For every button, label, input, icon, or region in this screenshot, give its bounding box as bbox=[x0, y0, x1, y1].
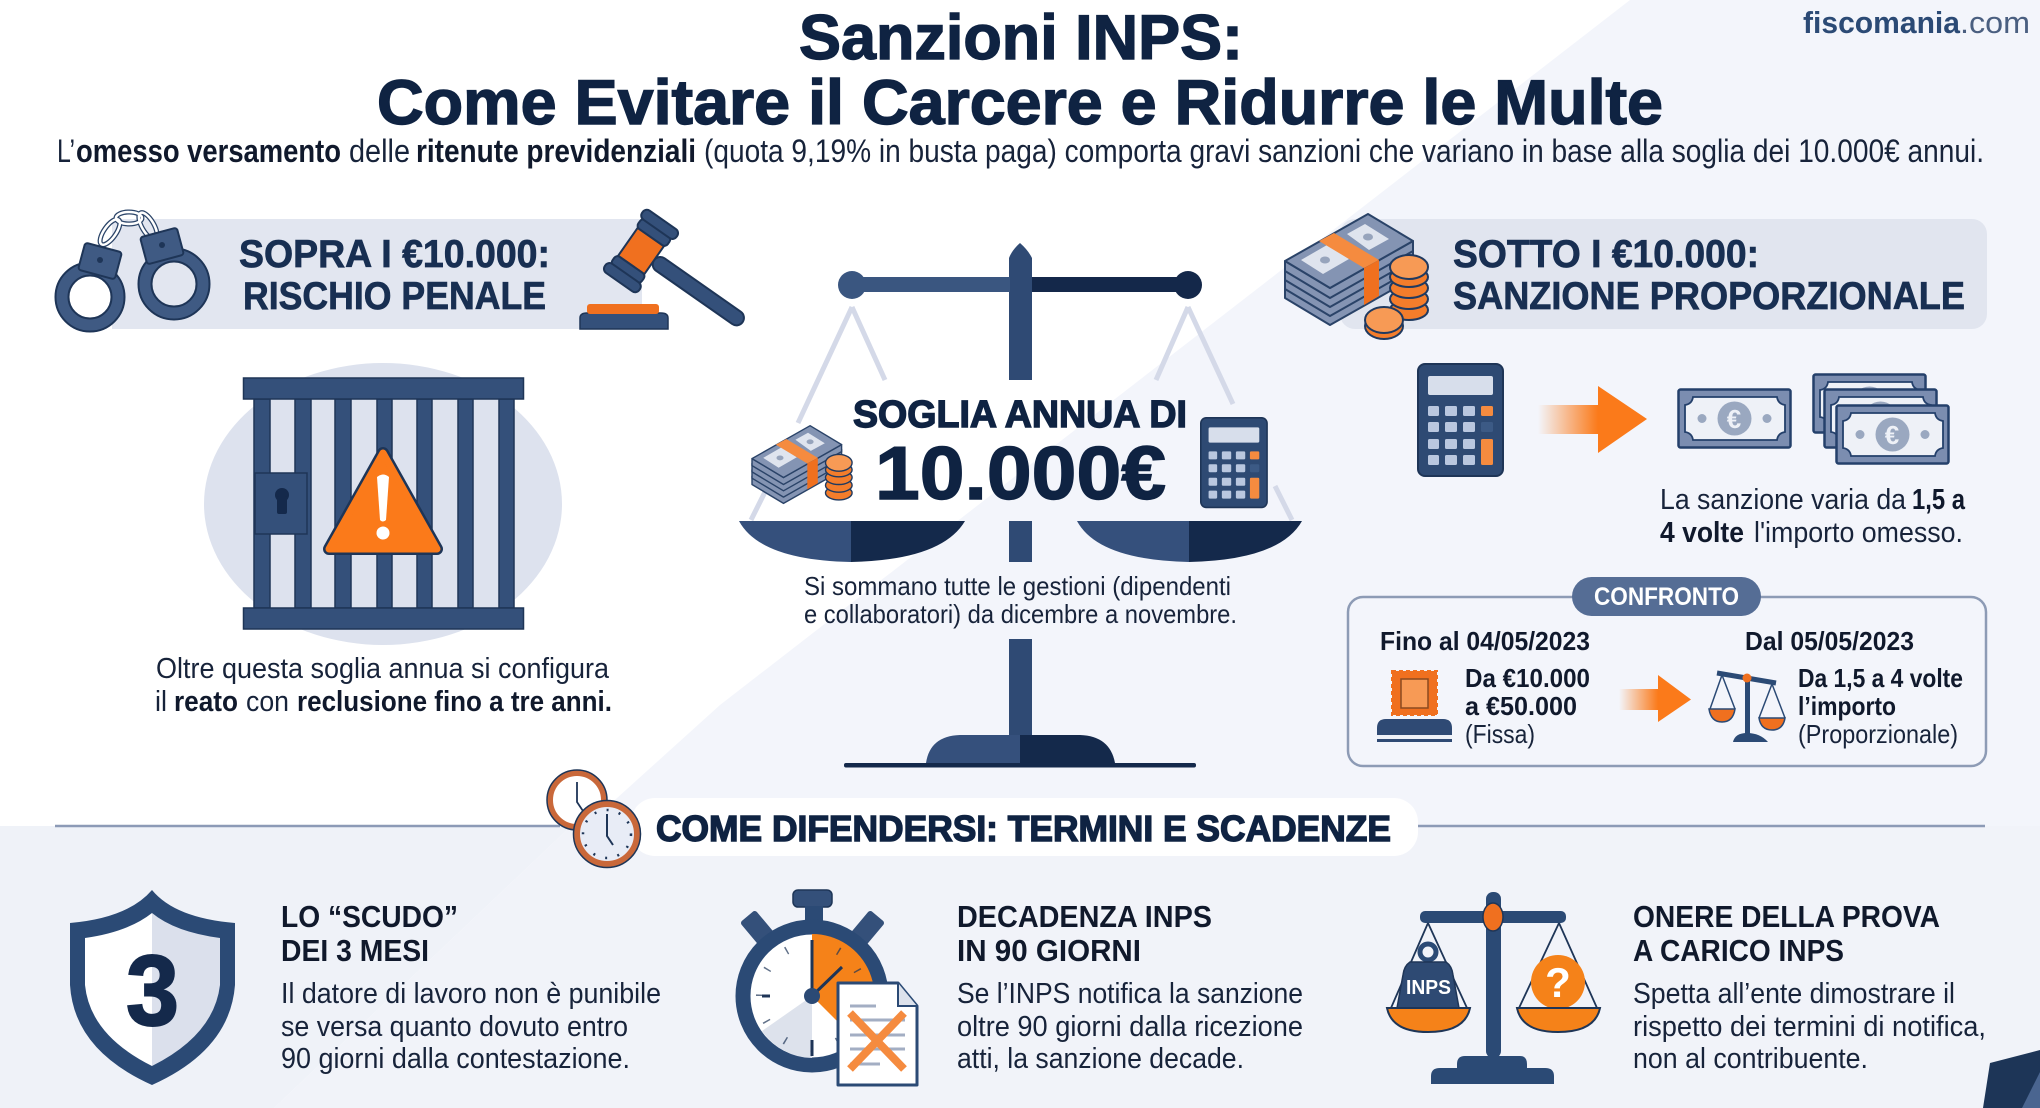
icon: calculator bbox=[1418, 364, 1503, 476]
item: scudo bbox=[70, 890, 661, 1085]
banner heading: SANZIONE PROPORZIONALE bbox=[1453, 275, 1965, 318]
column: dal 05/05/2023: (Proporzionale) bbox=[1798, 719, 1958, 749]
item: decadenza bbox=[740, 890, 1303, 1085]
icon: shield: 3 bbox=[126, 935, 179, 1047]
column: dal 05/05/2023: Dal 05/05/2023 bbox=[1745, 626, 1914, 656]
section: come difendersi bbox=[55, 770, 1986, 1085]
text: onere: Spetta all’ente dimostrare il bbox=[1633, 978, 1955, 1010]
text: decadenza bbox=[957, 899, 1303, 1075]
section heading pill bbox=[631, 798, 1418, 856]
text: sanzione varia bbox=[1660, 484, 1966, 549]
logo: fiscomania.com: fiscomania bbox=[1803, 5, 1961, 40]
text: decadenza: atti, la sanzione decade. bbox=[957, 1043, 1244, 1075]
confronto pill: CONFRONTO bbox=[1594, 583, 1739, 611]
subtitle: omesso versamento bbox=[76, 133, 341, 169]
panel: sopra i 10.000 bbox=[62, 208, 764, 718]
icon: single banknote bbox=[1678, 390, 1790, 448]
text: reato: reclusione fino a tre anni. bbox=[297, 686, 612, 718]
column: dal 05/05/2023 bbox=[1745, 626, 1963, 749]
icon: INPS scale with question mark: ? bbox=[1545, 959, 1571, 1006]
icon: INPS scale with question mark: INPS bbox=[1406, 977, 1451, 999]
icon: money pile bbox=[752, 426, 852, 503]
column: dal 05/05/2023: Da 1,5 a 4 volte bbox=[1798, 663, 1963, 693]
text: onere: A CARICO INPS bbox=[1633, 933, 1844, 968]
text: decadenza: IN 90 GIORNI bbox=[957, 933, 1141, 968]
text: onere: rispetto dei termini di notifica, bbox=[1633, 1011, 1986, 1043]
item: onere della prova bbox=[1387, 892, 1986, 1084]
banner heading bbox=[1453, 233, 1965, 318]
text: reato bbox=[155, 653, 612, 718]
panel: sotto i 10.000 bbox=[1285, 214, 1987, 766]
text: gestioni bbox=[804, 571, 1237, 629]
panel: confronto bbox=[1348, 577, 1986, 766]
section heading pill: COME DIFENDERSI: TERMINI E SCADENZE bbox=[656, 808, 1391, 849]
subtitle: ritenute previdenziali bbox=[416, 133, 696, 169]
column: fino al 04/05/2023 bbox=[1380, 626, 1590, 749]
icon: INPS scale with question mark bbox=[1387, 892, 1600, 1084]
column: fino al 04/05/2023: Da €10.000 bbox=[1465, 663, 1590, 693]
icon: banknote stack: € bbox=[1885, 420, 1899, 450]
text: scudo: se versa quanto dovuto entro bbox=[281, 1011, 628, 1043]
banner heading: SOPRA I €10.000: bbox=[239, 233, 550, 276]
text: scudo bbox=[281, 899, 661, 1075]
title: Sanzioni INPS: bbox=[799, 3, 1243, 73]
banner heading: SOTTO I €10.000: bbox=[1453, 233, 1759, 276]
banner: sanzione proporzionale bbox=[1340, 219, 1987, 329]
corner accent bbox=[1983, 1050, 2040, 1108]
title bbox=[377, 3, 1663, 138]
icon: stopwatch with crossed document bbox=[740, 890, 917, 1085]
text: onere bbox=[1633, 899, 1986, 1075]
text: sanzione varia: 1,5 a bbox=[1912, 484, 1966, 516]
text: gestioni: e collaboratori) da dicembre a novembre. bbox=[804, 599, 1237, 629]
icon: handcuffs bbox=[62, 210, 203, 325]
icon: banknote stack bbox=[1814, 374, 1948, 464]
text: decadenza: oltre 90 giorni dalla ricezione bbox=[957, 1011, 1303, 1043]
subtitle: L’ bbox=[57, 133, 75, 169]
icon: clocks bbox=[547, 770, 640, 868]
column: fino al 04/05/2023: a €50.000 bbox=[1465, 691, 1577, 721]
divider lines bbox=[55, 825, 1985, 827]
text: gestioni: Si sommano tutte le gestioni (dipendenti bbox=[804, 571, 1231, 601]
column: dal 05/05/2023: l’importo bbox=[1798, 691, 1896, 721]
text: scudo: DEI 3 MESI bbox=[281, 933, 429, 968]
subtitle bbox=[57, 133, 1984, 169]
icon: big scale bbox=[739, 243, 1302, 768]
subtitle: delle bbox=[349, 133, 410, 169]
confronto pill bbox=[1572, 577, 1761, 616]
icon: shield bbox=[70, 890, 235, 1085]
banner: rischio penale bbox=[112, 219, 642, 329]
text: onere: ONERE DELLA PROVA bbox=[1633, 899, 1940, 934]
text: sanzione varia: l'importo omesso. bbox=[1754, 517, 1963, 549]
logo: fiscomania.com: .com bbox=[1960, 5, 2030, 40]
text: decadenza: Se l’INPS notifica la sanzione bbox=[957, 978, 1303, 1010]
text: scudo: 90 giorni dalla contestazione. bbox=[281, 1043, 630, 1075]
banner heading bbox=[239, 233, 550, 318]
text: reato: il bbox=[155, 686, 167, 718]
banner heading: RISCHIO PENALE bbox=[243, 275, 546, 318]
text: reato: con bbox=[246, 686, 289, 718]
icon: money and coins bbox=[1285, 214, 1428, 339]
icon: single banknote: € bbox=[1727, 404, 1741, 434]
text: reato: reato bbox=[174, 686, 238, 718]
text: sanzione varia: La sanzione varia da bbox=[1660, 484, 1907, 516]
icon: prison bars with warning bbox=[204, 363, 562, 645]
heading: soglia: SOGLIA ANNUA DI bbox=[853, 394, 1187, 436]
arrow bbox=[1538, 386, 1647, 453]
text: scudo: Il datore di lavoro non è punibile bbox=[281, 978, 661, 1010]
text: onere: non al contribuente. bbox=[1633, 1043, 1868, 1075]
heading: soglia: 10.000€ bbox=[875, 431, 1166, 515]
arrow bbox=[1619, 675, 1691, 722]
heading: soglia bbox=[853, 394, 1187, 515]
panel: soglia centrale bbox=[739, 243, 1302, 768]
icon: calculator bbox=[1201, 418, 1267, 507]
column: fino al 04/05/2023: (Fissa) bbox=[1465, 719, 1535, 749]
title: Come Evitare il Carcere e Ridurre le Multe bbox=[377, 68, 1663, 138]
icon: stamp bbox=[1377, 671, 1452, 742]
text: sanzione varia: 4 volte bbox=[1660, 517, 1744, 549]
text: decadenza: DECADENZA INPS bbox=[957, 899, 1212, 934]
text: reato: Oltre questa soglia annua si configura bbox=[156, 653, 610, 685]
text: scudo: LO “SCUDO” bbox=[281, 899, 458, 934]
icon: gavel bbox=[580, 208, 764, 353]
icon: small scale bbox=[1709, 673, 1785, 742]
column: fino al 04/05/2023: Fino al 04/05/2023 bbox=[1380, 626, 1590, 656]
